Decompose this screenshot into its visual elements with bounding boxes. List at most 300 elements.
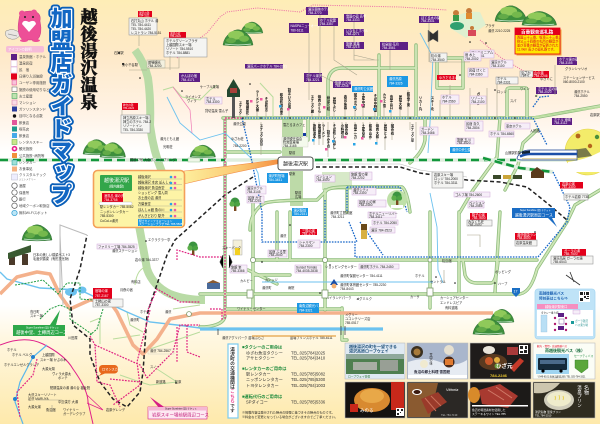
panel: east labels: ステーションサービス bbox=[563, 75, 595, 80]
vertical shop names above main road: スナック bbox=[238, 100, 242, 115]
plaza and station text: 駅前 bbox=[289, 150, 296, 155]
course label: 越後中里・土樽周辺コース bbox=[13, 310, 67, 336]
panel: purple hotel labels north: 784-2020 bbox=[538, 90, 552, 94]
panel: red spa labels: 宿場の湯 bbox=[95, 288, 109, 293]
panel: lavender lodging labels center: 784-2640 bbox=[269, 253, 283, 257]
right listing: 越後湯沢 魚沼食堂 bbox=[138, 185, 164, 190]
left listing: 駅レンタカー 785-5082 bbox=[100, 204, 134, 209]
panel: red spa labels: ゆきだるまの湯 bbox=[439, 75, 462, 80]
blue information bar: 駅ナカインフォメーション bbox=[139, 219, 173, 223]
right listing bbox=[138, 174, 182, 218]
panel: east labels: 湯沢高原 ガーラの湯 bbox=[553, 256, 583, 260]
note: 百番観音巡礼路: 11.0km 長さの巡礼路です。 bbox=[517, 46, 556, 52]
panel: red spa labels: 784-4600 bbox=[517, 236, 531, 240]
taxi contacts bbox=[242, 344, 326, 360]
panel: lavender lodging labels center: ユコンテリーズ店 bbox=[345, 316, 371, 321]
ad: onsen pudding: 名物 bbox=[583, 384, 589, 396]
panel: red spa labels: 三国の湯 bbox=[302, 228, 316, 233]
ad: grill food bbox=[470, 343, 531, 379]
legend rows: 観光施設 bbox=[19, 146, 33, 151]
inset circle: 岩原: 魚沼館 bbox=[46, 407, 56, 412]
panel: east labels: 784-2560 bbox=[442, 100, 456, 104]
left listing: 785-5300 bbox=[100, 214, 114, 218]
panel: top-left hotel labels: 784-2424 bbox=[123, 106, 135, 110]
ad: grill food: ひざ元 bbox=[496, 362, 513, 370]
panel: lavender labels west and south: 松原 bbox=[175, 379, 182, 384]
caption: bridge bbox=[33, 252, 71, 261]
ad: beef steak bbox=[468, 382, 531, 418]
panel: lavender lodging labels center: 784-2202 bbox=[351, 176, 365, 180]
panel: top-left hotel labels: リゾート 784-5510 bbox=[166, 47, 193, 51]
panel: east labels: 岩原駅 bbox=[590, 112, 600, 117]
vertical shop names above main road: 食堂 山口 bbox=[389, 94, 393, 110]
station inset header bbox=[100, 175, 132, 191]
title: 加盟店ガイドマップ: 加盟店ガイドマップ bbox=[48, 7, 72, 205]
inset circle: 岩原: ホテル ベルグ bbox=[12, 352, 33, 357]
rent-a-car contacts: トヨタレンタカー bbox=[246, 382, 279, 388]
plaza and station text: 雪だるまカフェ bbox=[283, 122, 305, 127]
panel: east labels: コンドミニアム bbox=[471, 50, 493, 54]
icon: butterfly photo bbox=[428, 30, 438, 42]
plaza and station text: 湯沢観光協会 bbox=[283, 136, 303, 141]
plaza and station text: 784-3165 bbox=[283, 144, 297, 148]
title: 越後湯沢温泉: 越後湯沢温泉 bbox=[76, 7, 102, 110]
vertical shop names above main road: 焼肉 さくら bbox=[317, 94, 321, 114]
panel: lavender lodging labels center: 湯沢シティ bbox=[353, 187, 369, 192]
panel: east labels: セントラル bbox=[430, 279, 447, 284]
route diagram bbox=[537, 310, 593, 336]
dotted pink prefectural border bbox=[177, 5, 527, 73]
panel: east labels: 山麓駅前駅 bbox=[505, 150, 522, 155]
panel: top-left hotel labels: TEL 784-4420 bbox=[131, 27, 151, 31]
rent-a-car contacts: TEL.025(784)1003 bbox=[291, 383, 326, 388]
rent-a-car contacts: 駅レンタカー bbox=[246, 370, 271, 376]
station plaza green block bbox=[282, 119, 352, 206]
panel: east labels: 784-2550 bbox=[574, 94, 588, 98]
panel: purple hotel labels north: 784-2215 bbox=[346, 45, 360, 49]
inset circle: 岩原: ホテル bbox=[7, 347, 17, 352]
panel: east labels: 民宿 ほくと bbox=[469, 68, 486, 72]
legend rows: 酒屋 bbox=[19, 183, 26, 188]
vertical shop names above main road: そば処 志 bbox=[264, 96, 268, 112]
note: 百番観音巡礼路: 秩父三十四番の札所の観音が bbox=[517, 38, 559, 44]
ad: snow country inn: 雪国の味 bbox=[429, 352, 433, 366]
vertical shop names below main road: 喫茶 春 bbox=[344, 123, 348, 136]
panel: red spa labels: 山の湯 bbox=[534, 70, 544, 75]
panel: top-left hotel labels: 石打駅 bbox=[114, 50, 124, 55]
course label: 岩原スキー場前駅周辺コース bbox=[148, 397, 209, 419]
legend rows: 銀行 bbox=[19, 196, 26, 201]
mini train icon bbox=[493, 175, 522, 179]
blue dotted bus route bbox=[242, 96, 570, 257]
panel: lavender labels west and south: 新道路 bbox=[156, 379, 166, 384]
vertical shop names below main road: 民宿 とよ bbox=[383, 123, 387, 139]
vertical shop names above main road: 土産 中屋 bbox=[361, 92, 365, 108]
panel: lavender lodging labels center: メグリー bbox=[345, 312, 358, 317]
inset circle: 岩原: ワイナリー bbox=[63, 407, 79, 412]
ad: onsen pudding: 温泉プリン bbox=[577, 384, 582, 408]
panel: red spa labels: 湯沢健康ランド bbox=[517, 232, 539, 237]
panel: red spa labels: 787-2167 bbox=[95, 294, 109, 298]
panel: purple hotel labels north: 旅館 萬葉 bbox=[346, 41, 360, 46]
orange bubble label: ロマンスカー bbox=[102, 367, 121, 372]
plaza and station text: 広場 bbox=[295, 194, 302, 199]
panel: east labels: カーサ bbox=[410, 294, 420, 299]
panel: red spa labels: ガーラの湯 bbox=[564, 248, 581, 253]
panel: east labels: リゾート bbox=[471, 96, 484, 100]
panel: lavender lodging labels center: 湯沢町 bbox=[262, 285, 272, 290]
panel: east labels: 湯沢ホテル bbox=[574, 89, 591, 94]
panel: top-left hotel labels: 湯元ともえ館 bbox=[160, 136, 180, 141]
road network bbox=[200, 45, 600, 340]
blue information bar: ステーションプラザ TEL 785-5505 bbox=[139, 222, 183, 226]
legend header: アイコンの説明 bbox=[8, 47, 32, 52]
legend rows: お食事処 bbox=[19, 166, 33, 171]
ad: steak restaurant Vittoria: Vittoria bbox=[446, 387, 459, 392]
footnotes bbox=[242, 410, 338, 419]
station name box: 越後湯沢駅 bbox=[283, 160, 308, 168]
panel: east labels: グランシャリオ bbox=[565, 66, 587, 71]
panel: lavender lodging labels center: 湯沢町立図書館 bbox=[330, 210, 353, 215]
panel: lavender lodging labels center: 湯沢町ホテル 784-2450 bbox=[360, 264, 394, 269]
panel: lavender lodging labels center: シャルマン bbox=[299, 240, 315, 244]
panel: lavender labels west and south: スノー bbox=[150, 364, 160, 369]
panel: top-left hotel labels bbox=[114, 11, 207, 162]
salmon expressway line bbox=[0, 272, 493, 354]
legend rows: マンション bbox=[19, 100, 37, 105]
panel: lavender labels west and south: 湯沢ステーション bbox=[112, 248, 137, 253]
plaza and station text: 784-3300 bbox=[206, 100, 220, 104]
route 17 shield bbox=[512, 288, 520, 297]
taxi contacts: ■タクシーのご用命は bbox=[242, 344, 283, 350]
route 17 shield: 17 bbox=[514, 290, 518, 294]
designated driver contact bbox=[242, 393, 326, 404]
panel: lavender lodging labels center: スキーパーク bbox=[222, 245, 241, 250]
railway lines bbox=[60, 164, 567, 407]
panel: red spa labels: 785-7600 bbox=[472, 216, 486, 220]
panel: east labels: 785-6543 bbox=[553, 260, 567, 264]
panel: lavender lodging labels center: Sunset Tomato bbox=[296, 266, 317, 270]
red label inset: 酒風呂 湯の沢 bbox=[104, 193, 125, 198]
road crossings bbox=[187, 257, 433, 316]
taxi contacts: TEL.025(784)2025 bbox=[291, 350, 326, 356]
course label: 越後中里・土樽周辺コース: Super Sunshine (湯) チケット bbox=[26, 325, 60, 329]
left listing: ニッポンレンタカー bbox=[100, 209, 129, 214]
legend rows: 民 宿 bbox=[19, 67, 30, 72]
footnotes: ※掲載内容は発行された時点の情報に基づきその時点のものです。 bbox=[242, 410, 335, 414]
ad: bus company: 〒949-6101 南魚沼郡湯沢町 TEL 025-784-3321 bbox=[537, 374, 586, 378]
legend rows: 飲食店 bbox=[19, 133, 30, 138]
shinkansen line bbox=[0, 158, 600, 172]
panel: east labels: 東京ホテル bbox=[506, 124, 523, 128]
designated driver contact: SPダイコー bbox=[246, 398, 268, 404]
panel: red spa labels: 784-1717 bbox=[302, 232, 316, 236]
legend rows: 日帰り入浴施設 bbox=[19, 74, 43, 79]
panel: blue facility labels: 湯沢中央公園 bbox=[452, 147, 471, 152]
panel: east labels: 784-2541 bbox=[471, 54, 485, 58]
panel: lavender lodging labels center: 784-2300 bbox=[299, 244, 313, 248]
panel: top-left hotel labels: 神立高原スキー場 bbox=[123, 115, 149, 120]
panel: top-left hotel labels: TEL 784-4411 bbox=[131, 23, 151, 27]
panel: east labels: ホテル bbox=[497, 76, 507, 81]
plaza and station text: 湯沢公園 bbox=[233, 121, 246, 126]
legend header bbox=[6, 46, 44, 52]
icon: yellow tower bbox=[361, 224, 367, 239]
panel: lavender lodging labels center: 784-2450 bbox=[359, 203, 373, 207]
icon: small building bbox=[207, 280, 220, 289]
course label: 岩原スキー場前駅周辺コース: 岩原スキー場前駅周辺コース bbox=[152, 412, 209, 418]
panel: blue facility labels: 湯沢駅前 bbox=[294, 208, 307, 212]
panel: east labels: 宿 水上 bbox=[465, 52, 476, 57]
vertical shop names above main road: 和菓子 東 bbox=[406, 91, 410, 107]
panel: blue facility labels: 784-3326 bbox=[389, 82, 403, 86]
plot with round trees bbox=[387, 190, 407, 210]
panel: top-left hotel labels: 上越国際スキー場 bbox=[166, 42, 192, 47]
designated driver contact: TEL.025(785)5336 bbox=[291, 400, 326, 404]
route diagram: タクシー乗り場 bbox=[541, 310, 559, 314]
panel: station inset bbox=[94, 170, 184, 228]
panel: east labels: ペンション bbox=[469, 201, 485, 205]
panel: purple hotel labels north: ホテル 東映 bbox=[554, 117, 572, 122]
trees bbox=[187, 198, 240, 255]
panel: lavender lodging labels center: 784-3211 bbox=[331, 215, 344, 219]
note: 百番観音巡礼路: 百番観音巡礼路 bbox=[521, 28, 554, 35]
vertical shop names below main road: ラーメン bbox=[321, 123, 325, 138]
panel: lavender lodging labels center: ショッピングセンター bbox=[325, 264, 357, 269]
panel: lavender lodging labels center: 民宿 山の家 bbox=[359, 199, 377, 204]
panel: east labels bbox=[410, 23, 600, 310]
vertical shop names above main road: そば 中野屋 bbox=[373, 93, 377, 113]
panel: top-left hotel labels: 湯沢の湯 bbox=[139, 11, 150, 15]
panel: purple hotel labels north: 旅館 山の湯 bbox=[335, 80, 353, 85]
panel: top-left hotel labels: リゾートイン bbox=[123, 124, 142, 128]
panel: blue facility labels: 784-2151 bbox=[294, 212, 307, 216]
vertical shop names below main road: 和風 山水 bbox=[368, 123, 372, 139]
panel: east labels: 旅館 玉川 bbox=[457, 137, 471, 142]
panel: purple hotel labels north: 784-3112 bbox=[554, 121, 567, 125]
panel: east labels: スパ bbox=[510, 98, 517, 103]
panel: lavender lodging labels center: 784-3411 bbox=[369, 215, 382, 219]
panel: east labels: 784-3520 bbox=[457, 141, 471, 145]
panel: lavender lodging labels center: カレッジ bbox=[265, 277, 278, 282]
panel: purple hotel labels north: 784-3770 bbox=[308, 11, 322, 15]
shinkansen train bbox=[517, 150, 577, 160]
illustration: yellow onsen circle bbox=[565, 129, 600, 175]
legend rows: 温泉旅館・ホテル bbox=[19, 54, 47, 59]
panel: purple hotel labels north: ホテル双葉 bbox=[320, 18, 337, 22]
blue information bar bbox=[138, 219, 183, 226]
caption: bridge: 毛渡沢橋梁（有形文化財） bbox=[33, 256, 71, 261]
rivers bbox=[0, 33, 443, 329]
route diagram: ガーラ湯沢 bbox=[575, 319, 588, 323]
panel: lavender lodging labels center: 784-4035-2838 bbox=[296, 269, 318, 273]
legend rows: 地域クーポン取扱店 bbox=[19, 203, 50, 208]
panel: purple hotel labels north: NASPAニューオータニ bbox=[290, 23, 323, 28]
panel: lavender labels west and south: 川田屋 bbox=[68, 335, 78, 340]
panel: top-left hotel labels: 湯沢の宿 bbox=[170, 32, 181, 36]
panel: blue facility labels: 南魚沼観光バス bbox=[299, 303, 321, 308]
panel: lavender lodging labels center: 784-2300 bbox=[353, 191, 367, 195]
leader lines north bbox=[122, 15, 555, 115]
panel: red spa labels: 土樽山の家 bbox=[95, 298, 112, 304]
ad: aerial photo: 湯沢高原ロープウェイ bbox=[349, 348, 389, 354]
left listing bbox=[99, 202, 134, 223]
panel: lavender lodging labels center: 湯沢町体育館センター 785-2230 bbox=[340, 282, 386, 287]
panel: purple hotel labels north: 784-2271 bbox=[346, 32, 360, 36]
panel: lavender labels west and south: エクラクラー亭 bbox=[148, 237, 170, 242]
vertical shop names above main road: 居酒屋 花 bbox=[245, 99, 249, 115]
plaza and station text: 貸切温泉 雪ん子 bbox=[205, 108, 229, 113]
panel: blue facility labels: 湯沢高原 bbox=[389, 76, 403, 81]
pink bus route bbox=[90, 118, 242, 407]
illustration: people in park bbox=[450, 8, 486, 38]
ad: aerial photo bbox=[345, 343, 405, 379]
taxi contacts: アサヒタクシー bbox=[246, 354, 275, 360]
inset circle: 岩原: 大沢スキーリゾート bbox=[28, 392, 57, 397]
vertical shop names above main road: 喫茶 ポプラ bbox=[353, 92, 357, 112]
legend rows: 施設の使用切りなど bbox=[19, 87, 50, 92]
right listing: 万葉食堂 bbox=[138, 201, 151, 206]
right listing: 越後湯沢 本店 ぽんしゅ bbox=[138, 180, 172, 184]
panel: east labels: 松島館 bbox=[442, 258, 452, 263]
panel: lavender lodging labels center: 民宿 かず bbox=[248, 195, 262, 200]
course label: 岩原スキー場前駅周辺コース: Super Sunshine (湯) チケット bbox=[165, 407, 197, 411]
panel: purple hotel labels north: ホテル 岩の湯 bbox=[538, 86, 559, 91]
panel: top-left hotel labels: 光明荘 bbox=[163, 144, 173, 149]
ad: beef steak: ステーキ＆ワイン TEL 785 bbox=[472, 412, 506, 416]
ad: snow country inn: 魚沼の郷土料理 雪国館 bbox=[414, 369, 450, 374]
legend rows bbox=[11, 54, 50, 216]
green hills bbox=[22, 6, 556, 335]
panel: east labels: 岩原スキー場 bbox=[434, 172, 454, 177]
panel: top-left hotel labels: 784-3111 bbox=[139, 14, 150, 18]
panel: lavender lodging labels center: カルビー bbox=[240, 278, 253, 283]
panel: lavender lodging labels center: ハイランドパーク bbox=[326, 295, 351, 300]
panel: east labels: 784-3466 bbox=[421, 131, 435, 135]
rent-a-car contacts: TEL.025(785)5300 bbox=[291, 377, 326, 382]
panel: lavender labels west and south: 湯沢町 bbox=[130, 317, 140, 322]
vertical shop names below main road: 旅館 湯本 bbox=[312, 123, 316, 139]
vertical shop names below main road: 焼肉 大和 bbox=[375, 123, 379, 139]
inset circle: 岩原: ポンテ bbox=[58, 375, 68, 380]
panel: east labels: ワイン bbox=[520, 86, 530, 91]
panel: red spa labels: 駒子の湯 bbox=[472, 212, 486, 217]
rent-a-car contacts: TEL.025(785)5082 bbox=[291, 372, 326, 376]
panel: top-left hotel labels: 784-4171 bbox=[181, 78, 195, 82]
panel: purple hotel labels north: 784-3155 bbox=[559, 61, 573, 65]
route diagram: バス乗り場 bbox=[575, 323, 588, 327]
panel: east labels: ホテル bbox=[442, 94, 452, 100]
panel: lavender lodging labels center: 785-3366 bbox=[231, 269, 245, 273]
panel: lavender labels west and south: スキー場 bbox=[30, 313, 44, 318]
black landmark dots bbox=[118, 41, 537, 384]
panel: east labels: プラザ bbox=[485, 23, 495, 28]
panel: purple hotel labels north: 湯沢東映ホテル bbox=[308, 6, 331, 12]
panel: purple hotel labels north: 784-3357 bbox=[320, 22, 334, 26]
vertical header box: 湯沢町の交通機関は こちら です bbox=[230, 346, 236, 414]
panel: red spa labels: 岩原の湯 bbox=[562, 181, 576, 186]
vertical shop names above main road bbox=[238, 80, 497, 118]
vertical shop names above main road: 民宿 大坂 bbox=[398, 94, 402, 110]
panel: east labels: カーシェアセンター bbox=[440, 295, 469, 300]
station inset header: （構内施設） bbox=[107, 184, 126, 188]
panel: east labels: 湯沢 2210 2225 bbox=[488, 28, 511, 33]
transport contacts panel bbox=[228, 344, 338, 419]
legend rows: レンタカー bbox=[19, 160, 37, 164]
vertical shop names below main road: 小料理 月 bbox=[340, 123, 344, 139]
panel: top-left hotel labels: 784-2222 bbox=[170, 34, 182, 38]
panel: east labels: 民宿 喜久 bbox=[466, 121, 480, 126]
panel: top-left hotel labels: 東小千谷駅 bbox=[122, 62, 139, 67]
vertical shop names above main road: ラーメン 大番 bbox=[255, 89, 259, 112]
ad: grill food: 784-2246 bbox=[490, 373, 508, 378]
legend rows: クリスタルテック bbox=[19, 172, 46, 177]
panel: east labels: ポッピング bbox=[495, 269, 512, 274]
panel: lavender labels west and south: 湯沢 bbox=[165, 309, 172, 314]
panel: purple hotel labels north: 784-3333 bbox=[346, 18, 360, 22]
vertical shop names above main road: カフェ 雪 bbox=[382, 92, 386, 108]
plaza and station text: ゆざわ荘 bbox=[231, 136, 245, 141]
designated driver contact: ■運転代行のご用命は bbox=[242, 393, 283, 400]
panel: lavender lodging labels center: 784-2251 bbox=[248, 199, 262, 203]
panel: purple hotel labels north: 784-2246 bbox=[335, 84, 349, 88]
right listing: お土産の店 湯沢 bbox=[138, 195, 162, 200]
panel: lavender lodging labels center: 湯沢 bbox=[280, 233, 287, 238]
inset circle: 岩原: ヴィラ大源太 bbox=[52, 371, 72, 376]
legend: icon explanation bbox=[6, 46, 50, 216]
panel: east labels: 松の湯 bbox=[431, 53, 441, 58]
left listing: CoCoLo湯沢 bbox=[100, 218, 119, 223]
panel: lavender labels west and south: 月夜の宿 bbox=[120, 287, 133, 292]
vertical shop names above main road: リカー 丸 bbox=[418, 96, 422, 111]
panel: lavender lodging labels center: 旅館 峯 bbox=[231, 264, 242, 270]
plaza and station text: 784-2200 bbox=[233, 144, 247, 148]
panel: lavender labels west and south: ホテル bbox=[140, 309, 150, 314]
panel: purple hotel labels north: 784-3561 bbox=[382, 46, 396, 50]
panel: red spa labels: 784-2246 bbox=[534, 74, 548, 78]
legend rows: ジェレメナリー bbox=[19, 177, 36, 181]
panel: lavender labels west and south: 岩の湯 784-3377 bbox=[135, 257, 159, 262]
panel: lavender labels west and south: 高日町 bbox=[30, 309, 40, 314]
panel: bus timetable bbox=[535, 289, 595, 339]
rent-a-car contacts bbox=[242, 365, 326, 388]
panel: blue facility labels: 784-3451 bbox=[268, 178, 282, 182]
panel: east labels: ホテル岩原 7738 bbox=[565, 194, 589, 199]
panel: east labels: 人形館 bbox=[530, 128, 540, 133]
ad: bus company bbox=[533, 343, 595, 379]
vertical shop names below main road: 喫茶 峰 bbox=[390, 123, 394, 136]
panel: purple hotel labels north: いなもとホテル bbox=[346, 28, 369, 33]
panel: top-left hotel labels: ホテル 784-8881 bbox=[166, 50, 190, 55]
vertical shop names above main road: 民宿 ふじ bbox=[332, 96, 336, 112]
inset circle: 岩原: 足沢 MARUYA bbox=[28, 396, 50, 401]
panel: top-left hotel labels: ヴィラ bbox=[187, 98, 197, 103]
vertical shop names below main road: 割烹 みその bbox=[326, 129, 330, 149]
panel: top-left hotel labels: レストラン 784-5151 bbox=[131, 30, 162, 35]
legend rows: ユーザン専用施設 bbox=[19, 80, 47, 85]
panel: lavender lodging labels center: 苗場プリンスホテル 785-6111 bbox=[290, 335, 333, 340]
panel: lavender lodging labels center: 旅館 雪の里 bbox=[351, 172, 369, 176]
ad: bus company: セーフティバス bbox=[574, 354, 593, 358]
vertical shop names below main road: スナック 百合 bbox=[259, 123, 263, 146]
red label inset: 784-3758 bbox=[104, 198, 118, 202]
green dotted course route bbox=[15, 280, 103, 335]
vertical shop names below main road: 居酒屋 雪 bbox=[317, 123, 321, 139]
legend rows: お土産屋 bbox=[19, 94, 33, 99]
station callout wedge bbox=[184, 159, 282, 184]
right listing: ぽんしゅ館 魚の川 bbox=[138, 207, 164, 212]
inset circle: 岩原: 大源太湯 bbox=[28, 404, 42, 409]
